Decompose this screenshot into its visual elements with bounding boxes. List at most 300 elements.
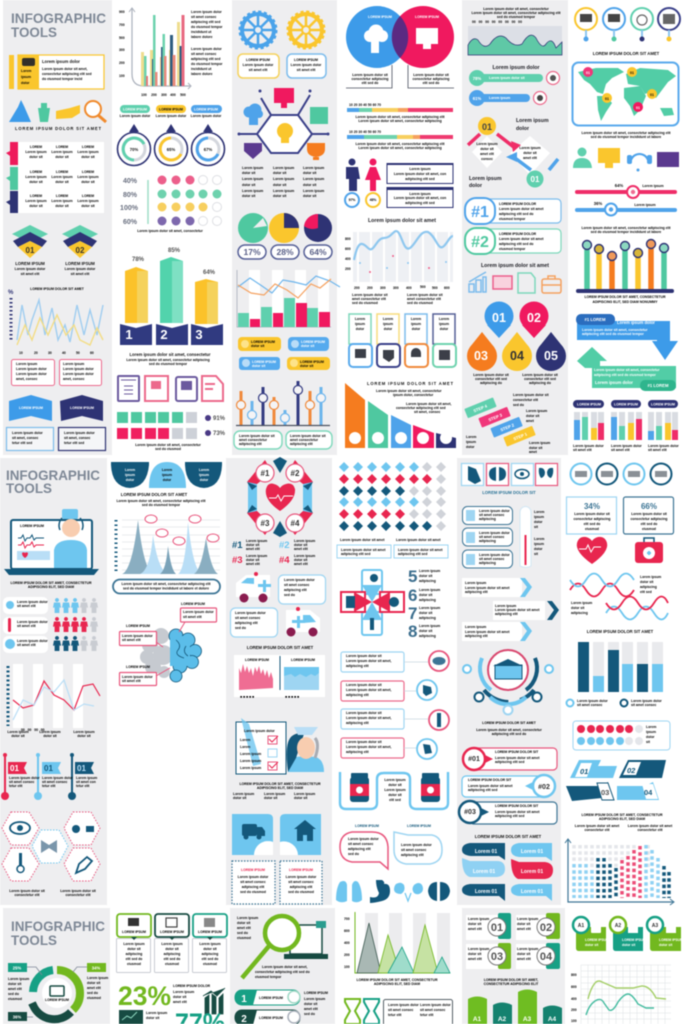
hourglasses with text: Lorem ipsum dolor [388,1003,419,1007]
world map: 01 [605,97,609,101]
text columns below hexagon: dolor sit [242,171,256,175]
line chart: blue and yellow: 40 [62,351,66,355]
venn diagram: elit sed do [362,81,378,85]
lollipop chart [236,381,330,426]
numbered drops 01 to 05: Lorem ipsum dolor sit [473,373,510,377]
callout: yellow banner: consectetur adipiscing elit sed [42,72,92,76]
pink text boxes [12,360,102,386]
chevron badges 01 02: LOREM IPSUM [15,261,45,266]
small bar charts: Lorem ipsum dolor [573,444,604,448]
line chart: red and blue [7,664,100,738]
numbered tabs 01 to 04: dolor sit [517,922,531,926]
area line chart: sed do eiusmod [352,301,378,305]
three headed text cards: LOREM IPSUM [198,930,222,934]
hospital ring diagram: LOREM IPSUM DOLOR SIT AMET [482,721,537,725]
rows with organ icons: adipiscing elit [346,750,369,754]
process diagram: arrows and diamonds: 01 [482,122,492,132]
ambulances with bubbles: Lorem ipsum dolor [284,578,315,582]
bowl tabs: Lorem [162,468,172,472]
icons: man and woman percentages: adipiscing elit sed [405,201,435,205]
bowl tabs: dolor [126,478,135,482]
brain with callouts: Lorem ipsum dolor [122,634,153,638]
icons: man and woman percentages: Lorem ipsum [409,167,431,171]
callout: yellow banner: Lorem [21,69,31,73]
small bar charts: LOREM IPSUM [614,402,638,406]
callout: yellow banner [9,55,104,89]
triangle area chart: 200 [344,953,350,957]
cards with thermometer: adipiscing [479,561,496,565]
blue and teal arrows [576,314,678,391]
stat boxes 34 66 percent with heart and medkit [566,497,674,564]
progress bars: 78 and 61 percent: Lorem ipsum dolor [493,65,539,71]
area line chart: Lorem ipsum dolor sit [352,293,388,297]
clipboard with nurse [236,718,324,774]
chevron badges 01 02: sit amet elit [21,272,40,276]
grid line chart: 600 [571,985,577,989]
numbered boxes #1 #2: eiusmod tempor [499,247,526,251]
icons: four map pins [575,8,680,42]
numbered boxes #1 #2: Lorem ipsum dolor sit amet [499,207,544,211]
dual bar charts: ■ ■ ■ ■ ■ [285,695,299,699]
step tags 1 to 4: Lorem [466,435,476,439]
DNA notes: elit sed [640,590,652,594]
venn diagram: LOREM IPSUM [415,15,439,19]
grid line chart [571,965,671,1024]
text block: chart notes: labore dolore [191,72,213,76]
rows with organ icons: Lorem ipsum dolor sit amet, [346,716,391,720]
dashed text boxes: adipiscing elit [242,885,265,889]
icons: chart, presentation, document, briefcase [469,263,561,293]
segmented timelines: Lorem ipsum dolor sit amet, consectetur adipiscing elit [355,115,445,119]
hexagon diagram with icons [238,88,330,160]
legend #1-#4: Lorem ipsum [246,554,267,558]
medicine bottles: elit sed [389,798,401,802]
speech bubbles: Lorem ipsum dolor [348,837,379,841]
hospital ring diagram [463,650,553,736]
rows with organ icons: Lorem ipsum dolor sit amet, [346,745,391,749]
text columns below hexagon: Lorem ipsum [242,177,263,181]
DNA notes: adipiscing [571,611,588,615]
text block: chart notes: do eiusmod tempor [191,25,223,29]
dot rating rows: 100% [120,205,139,212]
caption: clipboard: Lorem ipsum [294,792,315,796]
four column icon cards: ipsum [439,322,449,326]
segmented timelines: 10 20 30 40 50 60 70 [349,103,381,107]
icons: man and woman percentages: adipiscing elit sed [405,177,435,181]
heading: lorem ipsum 1: LOREM IPSUM DOLOR SIT AMET [15,126,101,131]
icons: person, monitor, headset, display [573,148,679,172]
three headed text cards: elit sed do [126,957,142,961]
caption: clipboard: dolor sit [264,796,278,800]
magnifier over laptop: Lorem ipsum [237,916,258,920]
numbered drops 01 to 05: 01 [492,311,506,325]
step tags 1 to 4: Lorem ipsum [529,441,550,445]
donut labels: sed do [87,991,98,995]
3d bars 1 2 3: 2 [160,327,168,342]
icons: lungs, stomach, kidneys, brain [336,880,450,903]
cross diagram with 5 6 7 8: dolor sit [419,593,433,597]
three headed text cards: adipiscing [126,952,142,956]
gauges: 70 65 67 percent with pills: 70% [130,147,138,152]
dot matrix chart: ADIPISCING ELIT, SED DIAM [599,817,645,821]
hospital ring diagram: Lorem ipsum dolor sit amet, consectetur [476,728,542,732]
three headed text cards: dolor sit [127,947,142,951]
four column icon cards: dolor [384,327,393,331]
clipboard with nurse: Lorem [240,745,250,749]
gauges: 70 65 67 percent with pills: LOREM IPSUM [194,108,218,112]
#01 #02 #03 bars: Lorem ipsum dolor sit amet [495,756,540,760]
panel: three colored rows: dolor sit [29,155,44,159]
stat boxes 34 66 percent with heart and medkit: consectetur adipiscing [631,517,667,521]
legend #1-#4: #3 [232,555,243,566]
text block: chart notes: labore dolore [191,35,213,39]
text columns below hexagon: dolor sit [242,183,256,187]
icons: man and woman percentages [345,158,453,208]
text boxes: gears: LOREM IPSUM [294,58,318,62]
hexagon with heart and #1-#4: #2 [291,469,300,478]
numbered drops 01 to 05: 05 [544,349,558,363]
legend buttons: dolor sit [300,364,314,368]
clipboard with nurse: Lorem ipsum [240,766,261,770]
line chart: red and blue: Lorem ipsum [39,730,61,734]
caption: clipboard [233,782,321,800]
legend #1-#4: dolor sit [246,558,260,562]
tags 01 to 04: 04 [644,788,653,797]
bookmarks 01 01 01: Lorem ipsum dolor [9,776,40,780]
area line chart [345,218,453,305]
three headed text cards: LOREM IPSUM [122,930,146,934]
process diagram: arrows and diamonds [468,117,558,189]
area chart: teal wave: Lorem ipsum dolor sit amet, consectetur adipiscing elit [471,11,561,15]
bar chart: navy and blue [566,629,663,707]
text columns below hexagon: dolor sit [303,171,317,175]
ambulances with bubbles: sed do [235,626,246,630]
line chart: blue and yellow: 20 [34,351,38,355]
step tags 1 to 4: dolor [466,445,475,449]
four column icon cards: dolor [356,327,365,331]
stat: 23 and 77 percent: dolor sit [173,995,187,999]
3d bars 1 2 3 [120,248,223,366]
illustration: doctor on laptop [4,509,99,589]
medicine bottles: dolor sit [388,783,403,787]
people pictograms [3,597,98,653]
step tags 1 to 4: STEP 3 [488,412,503,422]
speech bubbles: adipiscing elit [401,853,424,857]
panel: three colored rows: dolor sit [81,204,96,208]
donut labels: 25% [13,966,21,970]
step tags 1 to 4: STEP 2 [500,422,515,432]
dot rating rows: 60% [123,219,138,226]
panel: three colored rows: dolor sit [55,180,70,184]
panel: three colored rows: LOREM [82,145,94,149]
numbered rows 1 2 [235,990,328,1024]
step tags 1 to 4: STEP 1 [513,431,528,441]
dashed text boxes: Lorem ipsum dolor [286,875,317,879]
legend #1-#4: dolor sit [294,558,308,562]
line chart: red and blue: dolor sit [77,734,92,738]
gauges: 70 65 67 percent with pills: Lorem ipsum dolor [120,114,151,118]
cards A1 A2 A3: A1 [578,923,584,929]
dot rating rows: 40% [123,178,138,185]
panel: three colored rows: Lorem ipsum [51,150,73,154]
stepped area with icons: sit amet, consec [414,410,440,414]
DNA notes: dolor sit [571,606,585,610]
progress bars: 78 and 61 percent: 61% [473,96,481,101]
venn diagram [346,6,454,88]
stat boxes 34 66 percent with heart and medkit: consectetur adipiscing [574,517,610,521]
title: infographic tools 3: TOOLS [11,932,57,948]
venn diagram: elit sed do [423,81,439,85]
numbered boxes #1 #2: Lorem ipsum dolor sit amet [499,237,544,241]
panel: three colored rows: dolor sit [55,155,70,159]
diamond dot matrix: Lorem ipsum dolor sit amet [341,548,386,552]
pill text box [113,580,220,594]
four column icon cards: Lorem [383,317,393,321]
3d bars 1 2 3: Lorem ipsum dolor sit amet, consectetur [130,352,211,357]
tags 01 to 04: 03 [601,788,609,797]
process diagram: arrows and diamonds: dolor [469,183,482,189]
3d bars 1 2 3: 78% [132,257,145,263]
numbered tabs 01 to 04: amet elit [468,957,483,961]
text block: chart notes: Lorem ipsum dolor [191,10,222,14]
bookmarks 01 01 01: sit amet consec [9,780,35,784]
step tags 1 to 4: Lorem ipsum dolor sit [513,393,549,397]
pie charts 17 28 64 percent: 28% [276,247,294,257]
numbered tabs 01 to 04: dolor sit [517,952,531,956]
brain with callouts: LOREM IPSUM [126,624,150,628]
hourglasses with text: sit amet consec [388,1008,414,1012]
hourglasses with text: Lorem ipsum dolor [420,1003,451,1007]
title: infographic tools 2: TOOLS [6,480,52,496]
combo chart: lines and bars [237,270,340,327]
blue and teal arrows: Lorem ipsum dolor [617,320,655,325]
bookmarks 01 01 01: tetur elit [42,784,56,788]
step tags 1 to 4: STEP 4 [473,403,488,413]
progress squares 91 73 percent: Lorem ipsum dolor sit amet, consectetur [135,443,201,447]
lorem speech tabs: Lorem 01 [521,869,543,875]
process diagram: arrows and diamonds: Lorem ipsum [519,146,541,150]
cards with thermometer: sit [534,525,539,529]
step tags 1 to 4: amet [526,419,535,423]
step tags 1 to 4: amet [529,450,538,454]
bar chart: overlapping columns: 500 [180,93,186,97]
progress bars: 78 and 61 percent [469,65,560,106]
hourglasses with text: tetur elit [388,1013,402,1017]
caption: clipboard: dolor sit [233,796,247,800]
chevron badges 01 02: LOREM IPSUM [65,261,95,266]
bar chart: navy and blue: sit amet consec [577,703,603,707]
cards with thermometer [462,490,544,568]
legend buttons: LOREM IPSUM [252,360,276,364]
triangle area chart: 100 [344,965,350,969]
cards A1 A2 A3: dolor sit [659,943,673,947]
medicine bottles [340,772,448,809]
text block: chart notes: Lorem ipsum dolor [191,47,222,51]
brain with callouts: sit amet elit [122,679,142,683]
four column icon cards [349,314,456,367]
title: infographic tools 2 [6,467,100,496]
#01 #02 #03 bars: #01 [468,756,480,763]
people pictograms: sit amet elit [17,643,37,647]
process diagram: arrows and diamonds: amet elit [523,156,538,160]
bar chart: overlapping columns: 200 [151,93,157,97]
line chart: blue and yellow: 60 [90,351,94,355]
world map: 01 [650,93,654,97]
hexagon icons and caption: Lorem ipsum dolor sit [60,889,97,893]
caption: clipboard: Lorem ipsum [264,792,285,796]
dual bar charts [234,645,325,699]
icons: man and woman percentages: 97% [349,198,355,202]
panel: three colored rows: Lorem ipsum [77,175,99,179]
#01 #02 #03 bars [459,748,557,824]
donut labels: amet elit [87,986,102,990]
legend #1-#4 [232,539,315,566]
cylinder bars A1 to A4: LOREM IPSUM DOLOR SIT AMET, [484,978,539,982]
diamond dot matrix: Lorem ipsum dolor sit amet [340,538,385,542]
line chart: blue and yellow: LOREM IPSUM DOLOR SIT AMET [30,287,85,291]
numbered tabs 01 to 04: Lorem ipsum [468,917,489,921]
blue and teal arrows: adipiscing elit sed do eiusmod tempor [594,373,656,377]
world map: 01 [636,106,640,110]
numbered drops 01 to 05: 04 [510,349,524,363]
teal text boxes: Lorem ipsum dolor sit [290,434,326,438]
ambulances with bubbles [230,572,326,637]
numbered rows 1 2: LOREM IPSUM [304,991,328,995]
title: infographic tools 3: INFOGRAPHIC [11,918,105,934]
icons: notebooks [118,376,223,401]
bowl tabs: Lorem [125,468,135,472]
tags 01 to 04: 01 [580,767,588,776]
text columns below hexagon [242,166,324,198]
segmented timelines [347,103,453,150]
bookmarks 01 01 01: 01 [77,764,86,773]
people pictograms: sit amet elit [17,604,37,608]
speech bubbles: sed do [348,852,359,856]
bar chart: overlapping columns: 300 [119,48,125,52]
text block: chart notes: incididunt ut [191,67,212,71]
venn diagram: LOREM IPSUM [368,15,392,19]
cards with thermometer: LOREM IPSUM DOLOR SIT [482,490,536,495]
gauges: 70 65 67 percent with pills: LOREM IPSUM [123,108,147,112]
area line chart: 600 [444,286,450,290]
magnifier over laptop: eiusmod [237,936,251,940]
blue and teal arrows: Lorem ipsum dolor [595,380,633,385]
title: infographic tools 2: INFOGRAPHIC [6,467,100,483]
cross diagram with 5 6 7 8: Lorem ipsum [419,624,440,628]
gauges: 70 65 67 percent with pills [118,105,224,166]
triangle area chart [344,912,450,986]
bar chart: navy and blue: Lorem ipsum dolor [577,699,608,703]
pie charts 17 28 64 percent: 64% [309,247,327,257]
chevron arrows: Lorem ipsum [465,625,486,629]
text boxes: gears [238,54,326,78]
illustration: doctor on laptop: LOREM IPSUM DOLOR SIT AMET, CONSECTETUR [10,581,92,585]
area line chart: 400 [406,286,412,290]
progress bars: 78 and 61 percent: Lorem ipsum [489,96,510,100]
cylinder bars A1 to A4: A4 [548,1016,557,1023]
line chart: red and blue: Lorem ipsum [73,730,95,734]
speech bubbles: adipiscing elit [348,847,371,851]
area line chart: Lorem ipsum dolor sit [407,293,443,297]
stat: 23 and 77 percent: amet elit [173,1000,188,1004]
bookmarks 01 01 01: tetur elit [76,784,90,788]
dots panel: ipsum [646,730,656,734]
numbered drops 01 to 05: consectetur elit sed [524,377,556,381]
bookmarks 01 01 01: Lorem ipsum [76,776,97,780]
area line chart: 800 [345,237,351,241]
process diagram: arrows and diamonds: dolor [516,126,529,132]
icons: gears [240,12,324,48]
blue and teal arrows: Lorem ipsum dolor sit amet, consectetur [582,328,648,332]
blue and navy flags with text boxes: tetur elit sed [64,441,84,445]
teal text boxes: adipiscing elit [290,442,313,446]
stat boxes 34 66 percent with heart and medkit: elit sed do [641,522,657,526]
text block: chart notes: adipiscing elit sed [191,20,220,24]
cards A1 A2 A3: dolor sit [585,943,599,947]
numbered boxes #1 #2: adipiscing elit sed do [499,242,533,246]
stat: 23 and 77 percent: Lorem ipsum [146,1011,167,1015]
four column icon cards: Lorem [411,317,421,321]
teal text boxes: adipiscing elit [239,442,262,446]
cards with thermometer: ipsum [534,515,544,519]
blue and teal arrows: adipiscing elit sed do eiusmod tempor [582,332,644,336]
world map [572,51,678,139]
stat boxes 34 66 percent with heart and medkit: eiusmod [642,527,656,531]
bowl tabs: ipsum [162,473,172,477]
legend #1-#4: amet elit [246,562,261,566]
legend #1-#4: amet elit [294,547,309,551]
world map: 01 [630,71,634,75]
text columns below hexagon: dolor sit [303,194,317,198]
callout: yellow banner: ipsum [21,75,31,79]
hexagon with heart and #1-#4: #4 [291,519,300,528]
speech bubbles: sit amet consec [401,848,427,852]
three headed text cards: elit sed do [164,957,180,961]
sliders: 64 and 36 percent: sed do eiusmod tempor incididunt ut labore [591,230,661,234]
cards with thermometer: Lorem ipsum dolor [479,553,510,557]
speech bubbles [340,824,442,869]
lorem speech tabs: Lorem 01 [475,849,497,855]
dots panel: sit [646,740,651,744]
legend #1-#4: amet elit [246,547,261,551]
bar chart: overlapping columns: 500 [119,36,125,40]
process diagram: arrows and diamonds: amet elit [480,152,495,156]
icons: man and woman percentages: Lorem ipsum dolor sit amet, con [394,196,446,200]
rows with organ icons: Lorem ipsum dolor sit [346,683,382,687]
dashed text boxes: adipiscing elit [290,885,313,889]
segmented timelines: 10 20 30 40 50 60 70 [349,130,381,134]
step tags 1 to 4: consectetur elit [513,398,539,402]
3d bars 1 2 3: 1 [125,327,133,342]
step tags 1 to 4: Lorem ipsum [526,409,547,413]
panel: three colored rows [6,142,104,213]
panel: three colored rows: LOREM [30,194,42,198]
cards with thermometer: sit amet consec [479,557,505,561]
panel: three colored rows: dolor sit [29,180,44,184]
people pictograms: Lorem ipsum dolor [17,639,48,643]
numbered tabs 01 to 04: amet elit [517,957,532,961]
stat boxes 34 66 percent with heart and medkit: 66% [641,502,657,511]
panel: three colored rows: Lorem ipsum [25,199,47,203]
bar chart: overlapping columns: 100 [141,93,147,97]
cross diagram with 5 6 7 8: dolor sit [419,611,433,615]
panel: three colored rows: LOREM [30,170,42,174]
numbered rows 1 2: LOREM IPSUM [259,996,283,1000]
area line chart: amet consectetur elit [407,297,442,301]
line chart: red and blue: 00 00 00 00 [21,728,45,732]
bar chart: navy and blue: LOREM IPSUM DOLOR SIT AMET [587,629,654,634]
#01 #02 #03 bars: LOREM IPSUM DOLOR SIT [495,750,539,754]
